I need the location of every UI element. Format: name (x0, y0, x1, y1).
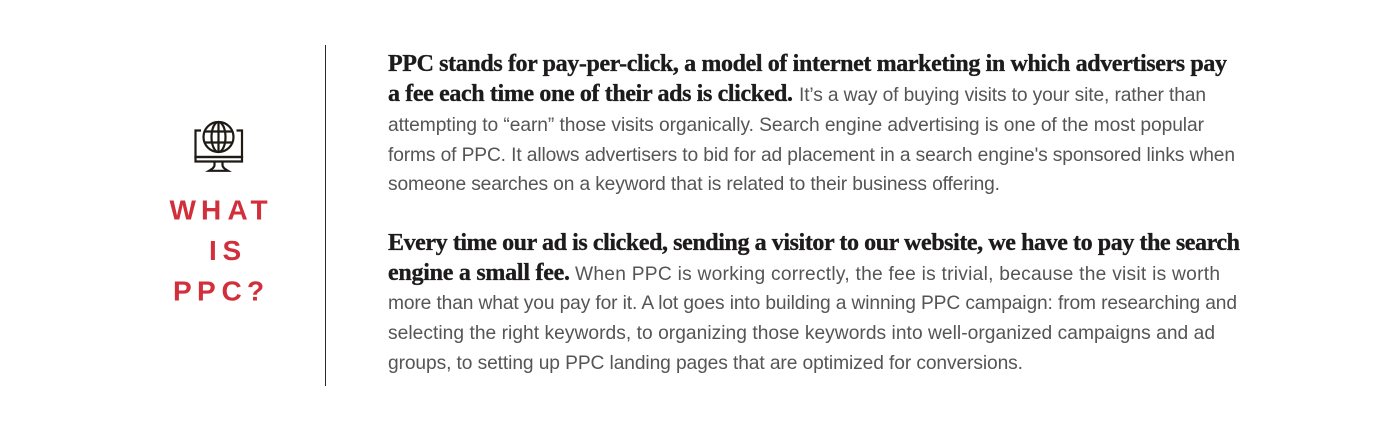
heading: what is PPC: I (209, 235, 217, 266)
text block: second paragraph (388, 230, 1240, 374)
vertical divider (325, 45, 326, 386)
text block: first paragraph: forms of PPC. It allows advertisers to bid for ad placement in a search engine's sponsored links when (388, 145, 1235, 166)
text block: first paragraph (388, 51, 1235, 195)
heading: what is PPC: H (201, 194, 221, 226)
heading: what is PPC: S (222, 235, 241, 266)
heading: what is PPC: A (228, 194, 248, 226)
icon: globe on computer monitor (196, 122, 242, 171)
heading: what is PPC: W (170, 194, 196, 226)
heading: what is PPC: P (197, 276, 216, 306)
text block: first paragraph: attempting to “earn” those visits organically. Search engine advertising is one of the most popular (388, 115, 1205, 136)
text block: first paragraph: a fee each time one of their ads is clicked. (388, 81, 793, 107)
text block: second paragraph: groups, to setting up PPC landing pages that are optimized for conversions. (388, 353, 1023, 374)
heading: what is PPC: T (250, 194, 268, 226)
heading: what is PPC: P (173, 276, 192, 306)
text block: second paragraph: engine a small fee. (388, 260, 570, 286)
heading: what is PPC (170, 194, 268, 306)
text block: first paragraph: someone searches on a keyword that is related to their business offering. (388, 174, 1000, 195)
heading: what is PPC: ? (247, 276, 264, 306)
text block: second paragraph: selecting the right keywords, to organizing those keywords into well-organized campaigns and ad (388, 323, 1215, 344)
text block: second paragraph: Every time our ad is clicked, sending a visitor to our website, we have to pay the search (388, 230, 1240, 256)
text block: first paragraph: It’s a way of buying visits to your site, rather than (799, 85, 1206, 106)
text block: second paragraph: When PPC is working correctly, the fee is trivial, because the visit is worth (575, 264, 1220, 285)
text block: second paragraph: more than what you pay for it. A lot goes into building a winning PPC campaign: from researching and (388, 293, 1237, 314)
heading: what is PPC: C (222, 276, 242, 306)
text block: first paragraph: PPC stands for pay-per-click, a model of internet marketing in which advertisers pay (388, 51, 1227, 77)
